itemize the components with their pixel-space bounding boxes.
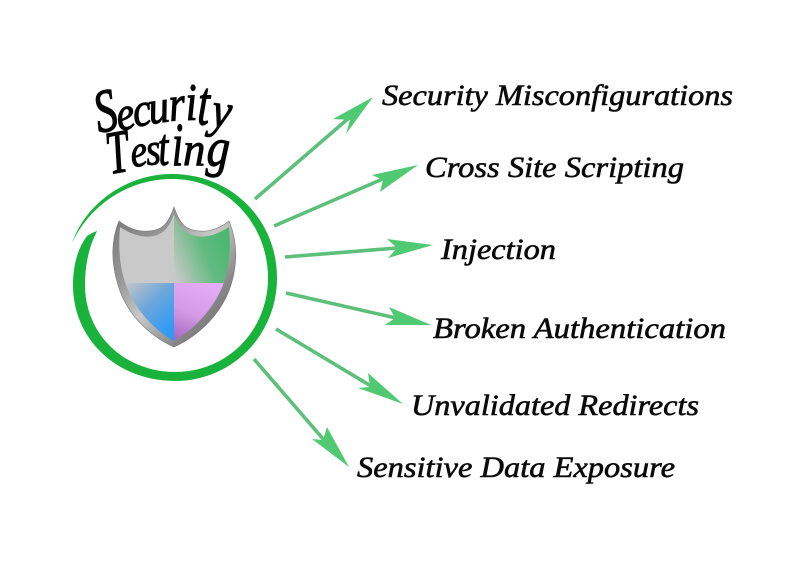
title line: Testing: n bbox=[183, 123, 206, 176]
title line: Security: c bbox=[128, 82, 155, 137]
arrow to Cross Site Scripting bbox=[274, 165, 418, 226]
title line: Security: t bbox=[196, 68, 212, 139]
arrow to Sensitive Data Exposure bbox=[254, 359, 349, 467]
title line: Testing: s bbox=[144, 125, 163, 176]
title line: Testing: g bbox=[205, 116, 232, 179]
label: Injection: Injection bbox=[440, 233, 556, 266]
title line: Security: e bbox=[110, 86, 139, 141]
title line: Security bbox=[87, 68, 236, 146]
arrow to Unvalidated Redirects bbox=[276, 329, 403, 404]
arrow to Broken Authentication bbox=[286, 293, 431, 325]
arrow to Security Misconfigurations bbox=[255, 97, 373, 199]
title: Security Testing bbox=[87, 68, 236, 188]
green circular ring bbox=[72, 174, 277, 381]
label: Cross Site Scripting: Cross Site Scripting bbox=[425, 151, 684, 184]
title line: Testing: i bbox=[172, 112, 183, 179]
title line: Security: u bbox=[144, 79, 172, 134]
icon: shield bbox=[113, 207, 236, 347]
title line: Security: S bbox=[87, 77, 124, 146]
label: Security Misconfigurations: Security Misconfigurations bbox=[382, 79, 733, 112]
shield quadrants bbox=[119, 214, 230, 341]
shield rim bbox=[113, 207, 236, 347]
label: Sensitive Data Exposure: Sensitive Data Exposure bbox=[357, 451, 675, 484]
label: Broken Authentication: Broken Authentication bbox=[433, 312, 726, 345]
title line: Testing: e bbox=[127, 126, 150, 178]
title line: Security: r bbox=[166, 75, 187, 132]
title line: Testing: T bbox=[101, 117, 137, 188]
label: Unvalidated Redirects: Unvalidated Redirects bbox=[411, 389, 699, 422]
title line: Security: i bbox=[184, 74, 198, 132]
title line: Security: y bbox=[205, 82, 236, 140]
arrow to Injection bbox=[285, 239, 433, 258]
title line: Testing: t bbox=[157, 117, 171, 176]
title line: Testing bbox=[101, 112, 232, 188]
